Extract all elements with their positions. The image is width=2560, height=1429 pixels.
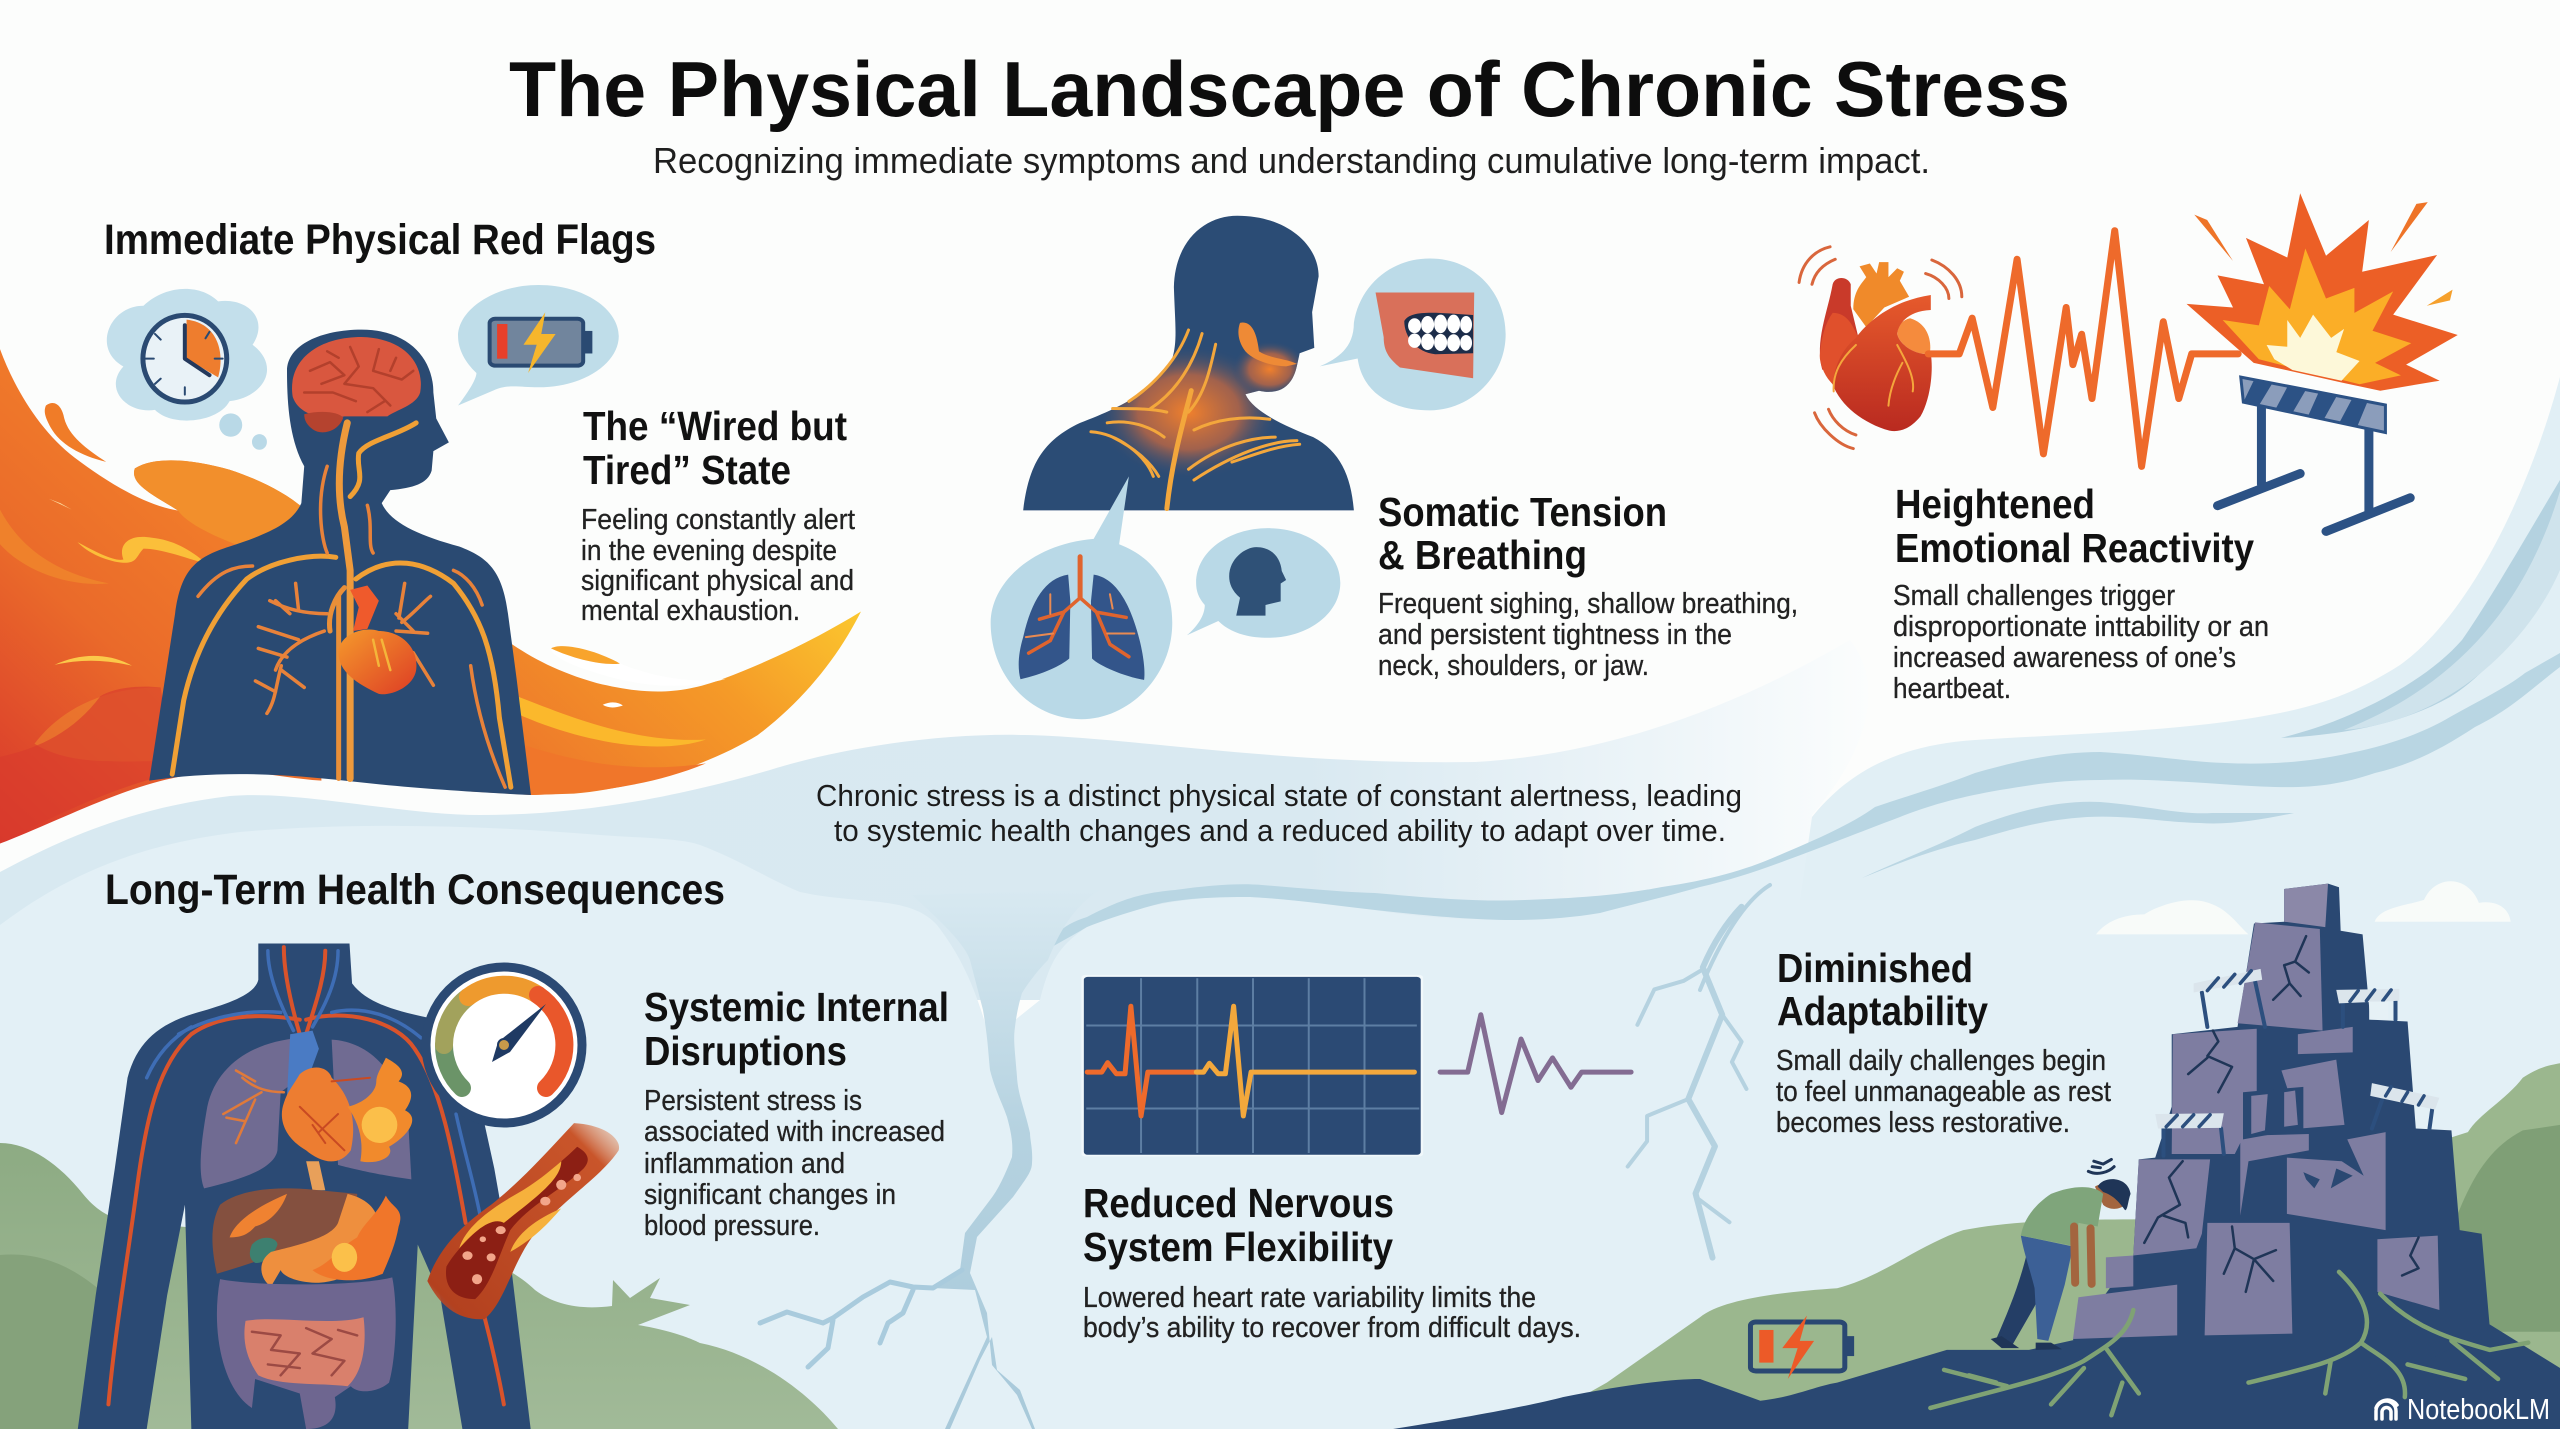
text: central summary [816,778,1742,848]
text: wired but tired description: significant physical and [581,565,854,597]
text: reactivity description: disproportionate inttability or an [1893,611,2269,643]
illustration: exhausted person [1991,1159,2131,1350]
text: systemic description: inflammation and [644,1148,845,1180]
text: adaptability description: Small daily challenges begin [1776,1045,2106,1077]
background: thin crack by Diminished [1700,885,1770,990]
icon: blood pressure gauge [426,967,582,1123]
background: crack branches left [760,1270,962,1367]
panel: immediate flames background [0,349,861,844]
heading: immediate physical red flags: Immediate Physical Red Flags [104,216,656,264]
icon: low battery [1750,1315,1854,1379]
text: somatic description: and persistent tightness in the [1378,619,1732,651]
background: darker left hill [0,1255,140,1429]
text: adaptability description [1776,1045,2111,1139]
background: crack branches right [1628,907,1746,1258]
panel: reduced nervous system flexibility [1081,975,1631,1344]
icon: lungs bubble [991,476,1172,719]
text: somatic description [1378,588,1798,682]
background: right green hills [1393,1063,2560,1429]
text: wired but tired description: in the evening despite [581,535,837,567]
panel: wired but tired: Tired” State [583,447,791,493]
panel: somatic tension and breathing: & Breathing [1378,532,1587,578]
icon: low battery speech bubble [458,285,619,406]
text: somatic description: neck, shoulders, or jaw. [1378,650,1649,682]
illustration: body with brain and heart [149,330,531,795]
text: central summary: to systemic health changes and a reduced ability to adapt over time. [834,813,1726,848]
background: lower pale blue left and centre [0,660,2560,1429]
panel: diminished adaptability: Adaptability [1777,988,1988,1034]
background: left green hill [0,1143,838,1429]
title: The Physical Landscape of Chronic Stress [509,45,2070,133]
heading: reduced nervous system flexibility: Reduced Nervous [1083,1180,1394,1226]
background: river stem [912,890,1100,1429]
background: flowing blue band [1031,653,2560,960]
text: nervous system description [1083,1282,1581,1344]
heading: heightened emotional reactivity: Heightened [1895,481,2095,527]
text: central summary: Chronic stress is a distinct physical state of constant alertness, leading [816,778,1742,813]
text: adaptability description: to feel unmanageable as rest [1776,1076,2111,1108]
panel: wired but tired [107,285,855,795]
illustration: neck and shoulders tension [1023,216,1354,510]
background: lower pale blue right [1800,377,2560,900]
text: nervous system description: Lowered heart rate variability limits the [1083,1282,1536,1314]
panel: diminished adaptability [1750,881,2528,1415]
panel: heightened emotional reactivity [1799,193,2458,705]
panel: systemic internal disruptions: Disruptions [644,1028,847,1074]
panel: systemic internal disruptions [78,943,949,1429]
subtitle: Recognizing immediate symptoms and understanding cumulative long-term impact. [653,140,1930,181]
text: systemic description [644,1085,945,1242]
background: top right blue swoosh [2281,480,2560,738]
icon: inflamed artery [427,1123,619,1319]
heading: long-term health consequences: Long-Term Health Consequences [105,866,725,914]
chart: ECG monitor [1081,975,1423,1156]
illustration: crumbling tower [1930,884,2528,1415]
illustration: heart, pulse, explosion and hurdle [1799,193,2458,531]
background: pale blue wave band [0,640,1869,1000]
heading: wired but tired: The “Wired but [583,403,847,449]
text: adaptability description: becomes less restorative. [1776,1107,2070,1139]
text: wired but tired description [581,504,855,627]
heading: somatic tension: Somatic Tension [1378,489,1667,535]
text: systemic description: blood pressure. [644,1210,820,1242]
heading: diminished adaptability: Diminished [1777,945,1973,991]
heading: systemic internal disruptions: Systemic Internal [644,984,949,1030]
text: reactivity description [1893,580,2269,705]
background: small blue swoosh [1862,802,2294,878]
text: reactivity description: Small challenges trigger [1893,580,2175,612]
text: wired but tired description: Feeling constantly alert [581,504,855,536]
background: right corner swath [2344,491,2560,730]
icon: clock in thought cloud [107,289,267,450]
text: nervous system description: body’s ability to recover from difficult days. [1083,1312,1581,1344]
ground: dark navy terrain [1393,1325,2560,1429]
icon: clenched jaw bubble [1320,259,1506,410]
icon: clouds [2096,881,2511,934]
text: systemic description: associated with increased [644,1116,945,1148]
text: wired but tired description: mental exhaustion. [581,595,800,627]
chart: fading pulse line [1440,1015,1631,1113]
panel: reduced nervous system flexibility: System Flexibility [1083,1224,1393,1270]
text: systemic description: significant changes in [644,1179,896,1211]
panel: somatic tension and breathing [991,216,1798,719]
panel: heightened emotional reactivity: Emotional Reactivity [1895,525,2254,571]
text: systemic description: Persistent stress is [644,1085,862,1117]
text: reactivity description: increased awareness of one’s [1893,642,2236,674]
text: somatic description: Frequent sighing, shallow breathing, [1378,588,1798,620]
illustration: torso with organs [78,943,531,1429]
icon: head silhouette bubble [1187,528,1340,638]
text: reactivity description: heartbeat. [1893,673,2011,705]
